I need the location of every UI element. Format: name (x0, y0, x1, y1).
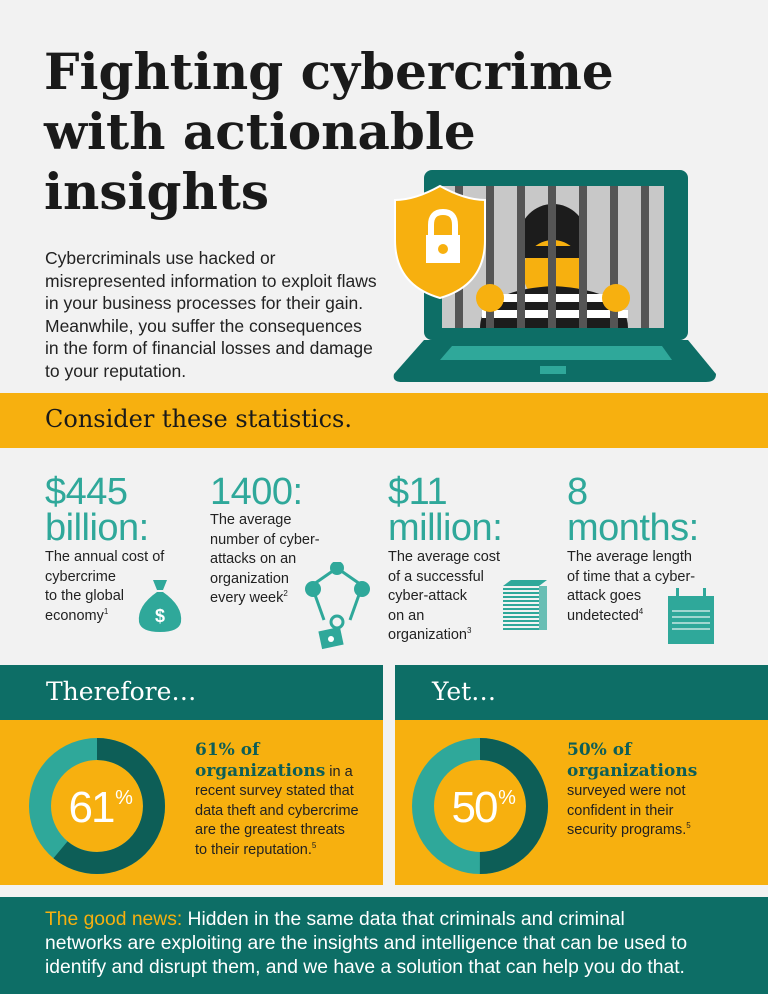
intro text: Cybercriminals use hacked or (45, 248, 276, 268)
heading: therefore: Therefore… (46, 677, 196, 706)
stat 3: million: (388, 507, 502, 549)
stat 2: attacks on an (210, 551, 296, 567)
stat 4: of time that a cyber- (567, 568, 695, 584)
donut chart: 50%: 50 (452, 783, 497, 832)
stat 1: to the global (45, 588, 124, 604)
icon: stack of money (503, 580, 547, 630)
stat 2: every week2 (210, 589, 288, 606)
text: 50% of organizations: organizations (567, 760, 697, 780)
text: 50% of organizations: surveyed were not (567, 783, 685, 799)
text: 50% of organizations: 50% of (567, 740, 631, 760)
illustration: laptop with jailed criminal and shield (394, 170, 716, 382)
stat 2: The average (210, 512, 291, 528)
intro text: in your business processes for their gain. (45, 293, 363, 313)
stat 1: economy1 (45, 606, 108, 624)
band: the good news (0, 897, 768, 994)
intro text: to your reputation. (45, 360, 186, 380)
stat 2: 1400: (210, 471, 303, 513)
stat 1 (45, 471, 182, 632)
stat 3: cyber-attack (388, 588, 467, 604)
title: insights (44, 162, 269, 221)
icon: calendar (668, 588, 714, 644)
stat 4: 8 (567, 471, 588, 513)
text: 61% of organizations: are the greatest threats (195, 822, 345, 838)
text: 61% of organizations: 61% of (195, 740, 259, 760)
stat 4: attack goes (567, 588, 641, 604)
heading: therefore (0, 665, 383, 720)
stat 1: billion: (45, 507, 149, 549)
stat 1: $445 (45, 471, 128, 513)
icon: money bag (138, 580, 182, 632)
stat 2: number of cyber- (210, 532, 320, 548)
panel: therefore (0, 665, 383, 885)
band: the good news: identify and disrupt them, and we have a solution that can help you do that. (45, 957, 685, 978)
title (44, 42, 614, 221)
donut chart: 61%: % (115, 787, 133, 809)
intro text: in the form of financial losses and damage (45, 338, 373, 358)
stat 4: The average length (567, 549, 692, 565)
stat 3: of a successful (388, 568, 484, 584)
text: 61% of organizations: organizations in a (195, 760, 353, 780)
text: 61% of organizations (195, 740, 359, 858)
stat 3 (388, 471, 547, 643)
stat 1: The annual cost of (45, 549, 164, 565)
stat 3: organization3 (388, 626, 471, 643)
band: the good news: The good news: Hidden in the same data that criminals and criminal (45, 909, 625, 930)
donut chart: 61% (29, 738, 165, 874)
donut chart: 50% (412, 738, 548, 874)
stat 4: undetected4 (567, 606, 643, 624)
donut chart: 50%: % (498, 787, 516, 809)
stat 4: months: (567, 507, 699, 549)
stat 3: The average cost (388, 549, 500, 565)
stat 1: cybercrime (45, 568, 116, 584)
text: 61% of organizations: data theft and cybercrime (195, 802, 359, 818)
text: 50% of organizations: confident in their (567, 802, 673, 818)
intro text: Meanwhile, you suffer the consequences (45, 316, 362, 336)
text: 61% of organizations: recent survey stated that (195, 783, 354, 799)
heading: yet (395, 665, 768, 720)
stat 2 (210, 471, 370, 650)
title: Fighting cybercrime (44, 42, 614, 101)
text: 50% of organizations (567, 740, 697, 838)
title: with actionable (44, 102, 476, 161)
text: 50% of organizations: security programs.5 (567, 821, 691, 838)
intro text (45, 248, 377, 380)
band: consider these statistics (0, 393, 768, 448)
heading: yet: Yet… (432, 677, 496, 706)
icon: network with padlock (305, 562, 370, 650)
intro text: misrepresented information to exploit flaws (45, 270, 377, 290)
stat 4 (567, 471, 714, 644)
stat 2: organization (210, 570, 289, 586)
panel: yet (395, 665, 768, 885)
stat 3: $11 (388, 471, 447, 513)
band: consider these statistics: Consider these statistics. (45, 405, 352, 433)
text: 61% of organizations: to their reputation.5 (195, 840, 316, 858)
stat 3: on an (388, 608, 424, 624)
donut chart: 61%: 61 (69, 783, 114, 832)
icon: money bag: $ (155, 606, 165, 626)
band: the good news: networks are exploiting are the insights and intelligence that can be used to (45, 933, 687, 954)
